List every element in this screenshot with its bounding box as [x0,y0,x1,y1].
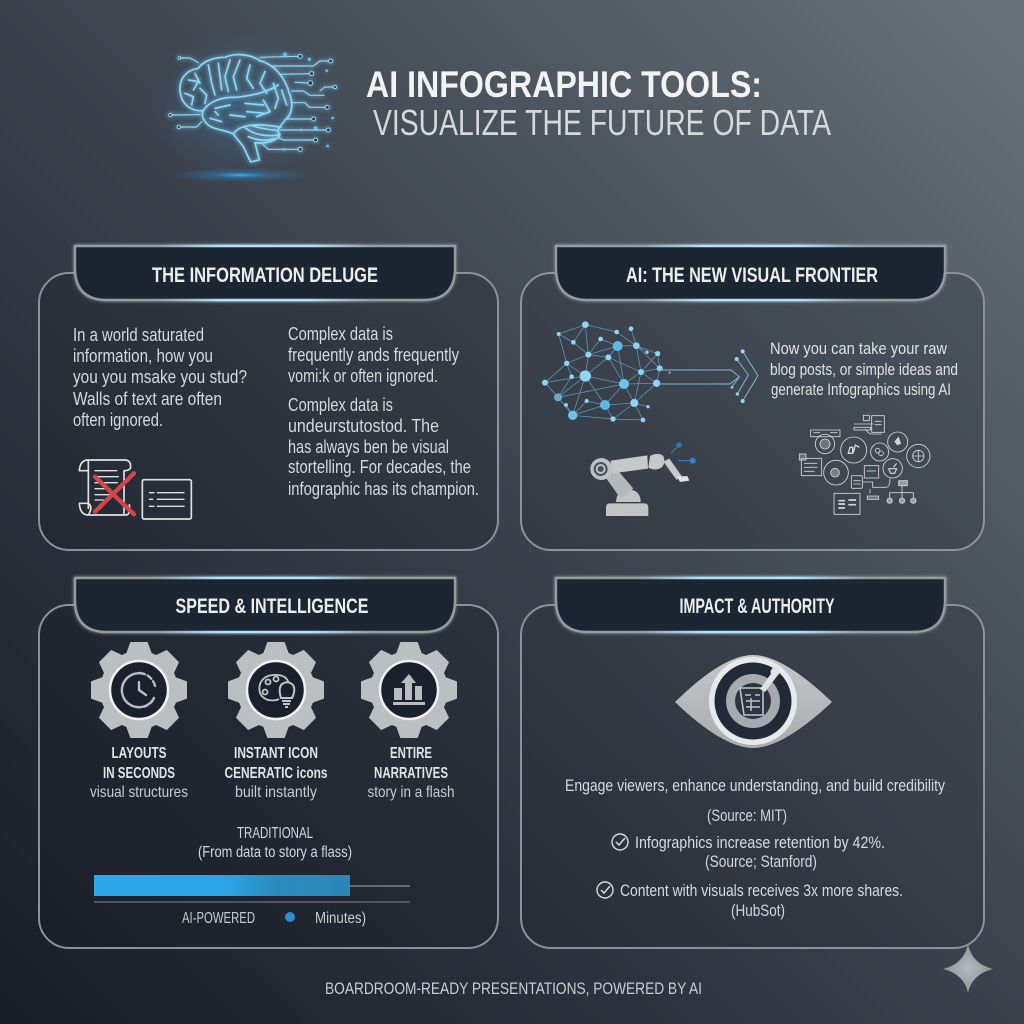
text block: left column [73,325,247,430]
footer tagline: BOARDROOM-READY PRESENTATIONS, POWERED BY AI [325,979,702,998]
title [366,64,831,143]
text block: right column: vomi:k or often ignored. [288,366,438,386]
heading: speed and intelligence: SPEED & INTELLIGENCE [176,594,368,618]
statistic: shares: (HubSot) [731,901,785,920]
text block: left column: Walls of text are often [73,389,222,409]
text block: left column: often ignored. [73,410,163,430]
text block: left column: you you msake you stud? [73,367,247,387]
text block: layouts in seconds [90,745,188,801]
text block: instant icon generation: built instantly [235,784,317,801]
text block: right column [288,324,479,499]
heading: impact and authority [556,578,945,632]
heading: ai the new visual frontier [556,246,945,300]
text block: description: blog posts, or simple ideas and [770,360,958,379]
text block: left column: In a world saturated [73,325,204,345]
icon: cluster of infographic glyphs [799,415,930,514]
text block: entire narratives: NARRATIVES [374,765,448,782]
heading: ai the new visual frontier: AI: THE NEW VISUAL FRONTIER [626,263,878,287]
bar chart: traditional vs ai-powered: AI-POWERED [182,910,255,927]
text block: layouts in seconds: IN SECONDS [103,765,175,782]
bar chart: traditional vs ai-powered: TRADITIONAL [237,825,313,842]
text block: right column: stortelling. For decades, the [288,457,471,477]
panel: impact and authority [521,578,984,948]
panel: ai the new visual frontier [521,246,984,550]
text block: entire narratives [368,745,454,801]
text block: instant icon generation: CENERATIC icons [224,765,328,782]
text block: description: Now you can take your raw [770,339,948,358]
panel: the information deluge [39,246,498,550]
statistic: retention: Infographics increase retention by 42%. [635,833,885,852]
icon: glowing circuit brain [150,33,340,182]
text block: right column: infographic has its champion. [288,479,479,499]
text block: right column: has always ben be visual [288,437,449,457]
icon: eye with target and document [675,655,832,748]
text block: left column: information, how you [73,346,213,366]
heading: speed and intelligence [75,578,455,632]
text block: instant icon generation [224,745,328,801]
text block: entire narratives: story in a flash [368,784,454,801]
statistic: retention [612,833,885,871]
text block: description [770,339,958,399]
bar chart: traditional vs ai-powered [94,825,410,927]
heading: the information deluge [75,246,455,300]
panel: speed and intelligence [39,578,498,948]
icon: gear with palette and bulb [228,642,324,738]
icon: sparkle [943,944,993,993]
icon: robot arm [590,442,696,516]
text block: right column: frequently ands frequently [288,345,459,365]
heading: the information deluge: THE INFORMATION DELUGE [152,263,378,287]
text block: layouts in seconds: visual structures [90,784,188,801]
icon: gear with clock [91,642,187,738]
title: VISUALIZE THE FUTURE OF DATA [373,102,831,143]
statistic: shares: Content with visuals receives 3x more shares. [620,881,903,900]
statistic: shares [597,881,903,920]
statistic: retention: (Source; Stanford) [705,852,817,871]
icon: gear with rising bar chart [361,642,457,738]
text block: right column: Complex data is [288,324,393,344]
heading: impact and authority: IMPACT & AUTHORITY [680,594,834,618]
icon: neural network with arrow [542,321,758,422]
bar chart: traditional vs ai-powered: Minutes) [315,910,366,927]
bar chart: traditional vs ai-powered: (From data to story a flass) [198,844,352,861]
text block: source mit: (Source: MIT) [707,806,787,825]
title: AI INFOGRAPHIC TOOLS: [366,64,762,105]
text block: layouts in seconds: LAYOUTS [112,745,167,762]
text block: description: generate Infographics using AI [771,380,951,399]
icon: crossed-out scroll and list card [79,460,191,519]
text block: entire narratives: ENTIRE [390,745,432,762]
text block: engage statement: Engage viewers, enhance understanding, and build credibility [565,776,945,795]
text block: instant icon generation: INSTANT ICON [234,745,318,762]
text block: right column: undeurstutostod. The [288,416,439,436]
text block: right column: Complex data is [288,395,393,415]
